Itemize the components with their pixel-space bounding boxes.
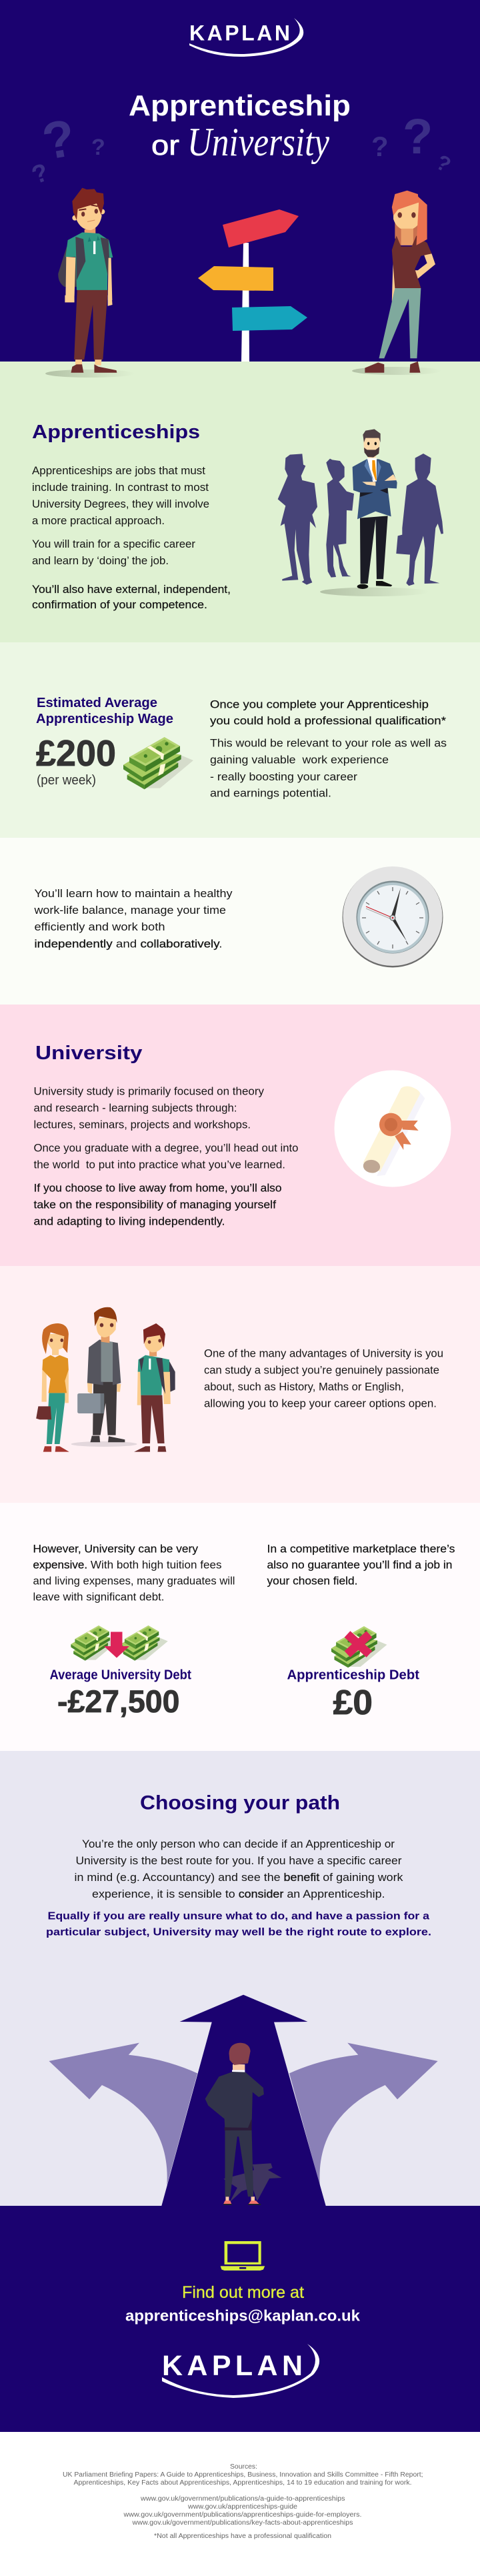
text block: what apprenticeships are: and learn by ‘doing’ the job. [32, 555, 169, 567]
illustration: professional with silhouettes [278, 429, 443, 596]
heading: choosing your path: Choosing your path [140, 1792, 340, 1814]
icon: question marks: ? [38, 107, 79, 171]
panel: debt comparison [0, 1503, 480, 1751]
illustration: signpost [198, 209, 307, 362]
panel: choosing your path [0, 1751, 480, 2206]
text block: work-life balance: You’ll learn how to maintain a healthy [35, 888, 233, 900]
text block: job market: also no guarantee you’ll find a job in [267, 1559, 452, 1571]
text block: university cost: However, University can be very [33, 1543, 199, 1555]
callout: university route [46, 1910, 431, 1938]
text block: sources: Apprenticeships, Key Facts about Apprenticeships, Apprenticeships, 14 to 19 education and training for work. [73, 2479, 412, 2487]
label: average university debt: Average University Debt [49, 1668, 191, 1682]
text block: university study: Once you graduate with a degree, you’ll head out into [33, 1142, 299, 1154]
icon: question marks [28, 107, 455, 190]
text block: university cost [33, 1543, 235, 1603]
text block: university study: University study is primarily focused on theory [33, 1086, 265, 1098]
text block: decision guidance: experience, it is sensible to consider an Apprenticeship. [92, 1888, 385, 1900]
heading: University: University [35, 1043, 143, 1064]
illustration: three arrows and person [49, 1995, 438, 2206]
text block: advantages: about, such as History, Maths or English, [204, 1381, 404, 1393]
text block: university study: If you choose to live away from home, you’ll also [33, 1182, 281, 1194]
text block: what apprenticeships are: a more practical approach. [32, 515, 165, 527]
icon: money with down arrow [71, 1626, 168, 1661]
text block: work-life balance: work-life balance, manage your time [33, 904, 226, 916]
text block: what apprenticeships are: You will train for a specific career [32, 538, 195, 550]
text block: professional qualification: - really boosting your career [210, 771, 358, 783]
contact email: apprenticeships@kaplan.co.uk [125, 2307, 361, 2324]
illustration: three students [36, 1307, 175, 1452]
text block: what apprenticeships are: University Degrees, they will involve [32, 498, 209, 510]
title: Apprenticeship [129, 89, 351, 122]
text block: work-life balance: efficiently and work both [35, 921, 165, 933]
panel: university [0, 1005, 480, 1266]
text block: what apprenticeships are: confirmation of your competence. [32, 599, 207, 611]
text block: professional qualification: you could hold a professional qualification* [210, 715, 447, 727]
text block: what apprenticeships are [32, 465, 231, 611]
text block: work-life balance [33, 888, 233, 950]
text block: what apprenticeships are: include training. In contrast to most [32, 482, 209, 494]
text block: decision guidance [75, 1838, 403, 1900]
text block: decision guidance: University is the best route for you. If you have a specific career [76, 1855, 402, 1867]
panel: sources [0, 2432, 480, 2576]
text block: professional qualification: This would be relevant to your role as well as [210, 738, 447, 750]
text block: university cost: leave with significant debt. [33, 1591, 164, 1603]
text block: university cost: and living expenses, many graduates will [33, 1575, 235, 1587]
panel: work-life balance [0, 838, 480, 1005]
text block: job market: In a competitive marketplace there’s [267, 1543, 455, 1555]
heading: estimated wage [36, 696, 173, 726]
icon: question marks: ? [403, 109, 433, 164]
icon: money with cross [331, 1626, 387, 1668]
text block: professional qualification: and earnings potential. [210, 787, 331, 799]
icon: clock [343, 866, 443, 967]
logo: Kaplan header [189, 18, 303, 57]
text block: decision guidance: in mind (e.g. Accountancy) and see the benefit of gaining work [75, 1872, 403, 1884]
text block: decision guidance: You’re the only person who can decide if an Apprenticeship or [82, 1838, 395, 1850]
text block: university study: and adapting to living independently. [33, 1215, 225, 1227]
text block: professional qualification: Once you complete your Apprenticeship [210, 699, 429, 711]
text block: advantages [204, 1347, 443, 1410]
text block: university study: lectures, seminars, projects and workshops. [33, 1119, 251, 1131]
heading: estimated wage: Estimated Average [37, 696, 157, 710]
text block: sources: www.gov.uk/government/publications/apprenticeships-guide-for-employers. [123, 2511, 361, 2519]
icon: diploma scroll [335, 1070, 451, 1187]
text block: sources: www.gov.uk/apprenticeships-guide [187, 2503, 297, 2511]
icon: question marks: ? [28, 158, 52, 190]
illustration: male student with backpack [58, 188, 117, 373]
text block: sources: Sources: [230, 2463, 257, 2471]
caption: per week: (per week) [37, 773, 96, 788]
text block: what apprenticeships are: Apprenticeships are jobs that must [32, 465, 205, 477]
text block: what apprenticeships are: You’ll also have external, independent, [32, 584, 231, 596]
logo: Kaplan footer [162, 2344, 319, 2398]
icon: question marks: ? [432, 150, 455, 177]
logo: Kaplan header: KAPLAN [189, 21, 290, 45]
call to action: Find out more at [182, 2283, 304, 2302]
text block: work-life balance: independently and collaboratively . [35, 938, 223, 950]
callout: university route: particular subject, University may well be the right route to explore. [46, 1926, 431, 1938]
illustration: student shadow right [352, 367, 441, 375]
text block: university cost: expensive. With both high tuition fees [33, 1559, 221, 1571]
title: University [187, 120, 329, 164]
text block: job market: your chosen field. [267, 1575, 357, 1587]
text block: sources: UK Parliament Briefing Papers: A Guide to Apprenticeships, Business, Innovation and Skills Committee - Fifth Report; [63, 2471, 423, 2479]
stat: £200: £200 [36, 732, 116, 774]
text block: sources: www.gov.uk/government/publications/a-guide-to-apprenticeships [140, 2495, 345, 2503]
title [129, 89, 351, 164]
panel: find out more footer [0, 2206, 480, 2432]
icon: question marks: ? [91, 135, 105, 160]
title: or [151, 129, 179, 161]
heading: estimated wage: Apprenticeship Wage [36, 712, 173, 726]
text block: sources: *Not all Apprenticeships have a professional qualification [154, 2533, 331, 2540]
icon: money stack [123, 737, 193, 789]
illustration: female student [365, 191, 435, 373]
text block: university study: take on the responsibility of managing yourself [33, 1199, 276, 1211]
stat: apprenticeship debt amount: £0 [333, 1684, 373, 1722]
illustration: student shadow [45, 370, 135, 378]
text block: advantages: One of the many advantages of University is you [204, 1347, 443, 1359]
text block: university study [33, 1086, 299, 1227]
text block: university study: and research - learning subjects through: [33, 1102, 237, 1114]
callout: university route: Equally if you are really unsure what to do, and have a passion for a [48, 1910, 429, 1922]
panel: hero header [0, 0, 480, 362]
logo: Kaplan footer: KAPLAN [162, 2350, 303, 2382]
stat: university debt amount: -£27,500 [57, 1684, 180, 1719]
text block: university study: the world to put into practice what you’ve learned. [33, 1159, 285, 1171]
text block: advantages: allowing you to keep your career options open. [204, 1398, 437, 1410]
label: apprenticeship debt: Apprenticeship Debt [287, 1668, 419, 1682]
text block: advantages: can study a subject you’re genuinely passionate [204, 1365, 439, 1377]
heading: Apprenticeships: Apprenticeships [32, 422, 200, 443]
panel: wage and qualification [0, 642, 480, 838]
icon: question marks: ? [371, 131, 389, 162]
text block: professional qualification [210, 699, 447, 799]
text block: job market [267, 1543, 455, 1587]
text block: sources: www.gov.uk/government/publications/key-facts-about-apprenticeships [131, 2519, 353, 2527]
icon: laptop [221, 2241, 265, 2271]
text block: sources [63, 2463, 423, 2540]
panel: apprenticeships intro [0, 188, 480, 642]
text block: professional qualification: gaining valuable work experience [210, 754, 389, 766]
panel: advantages of university [0, 1266, 480, 1503]
